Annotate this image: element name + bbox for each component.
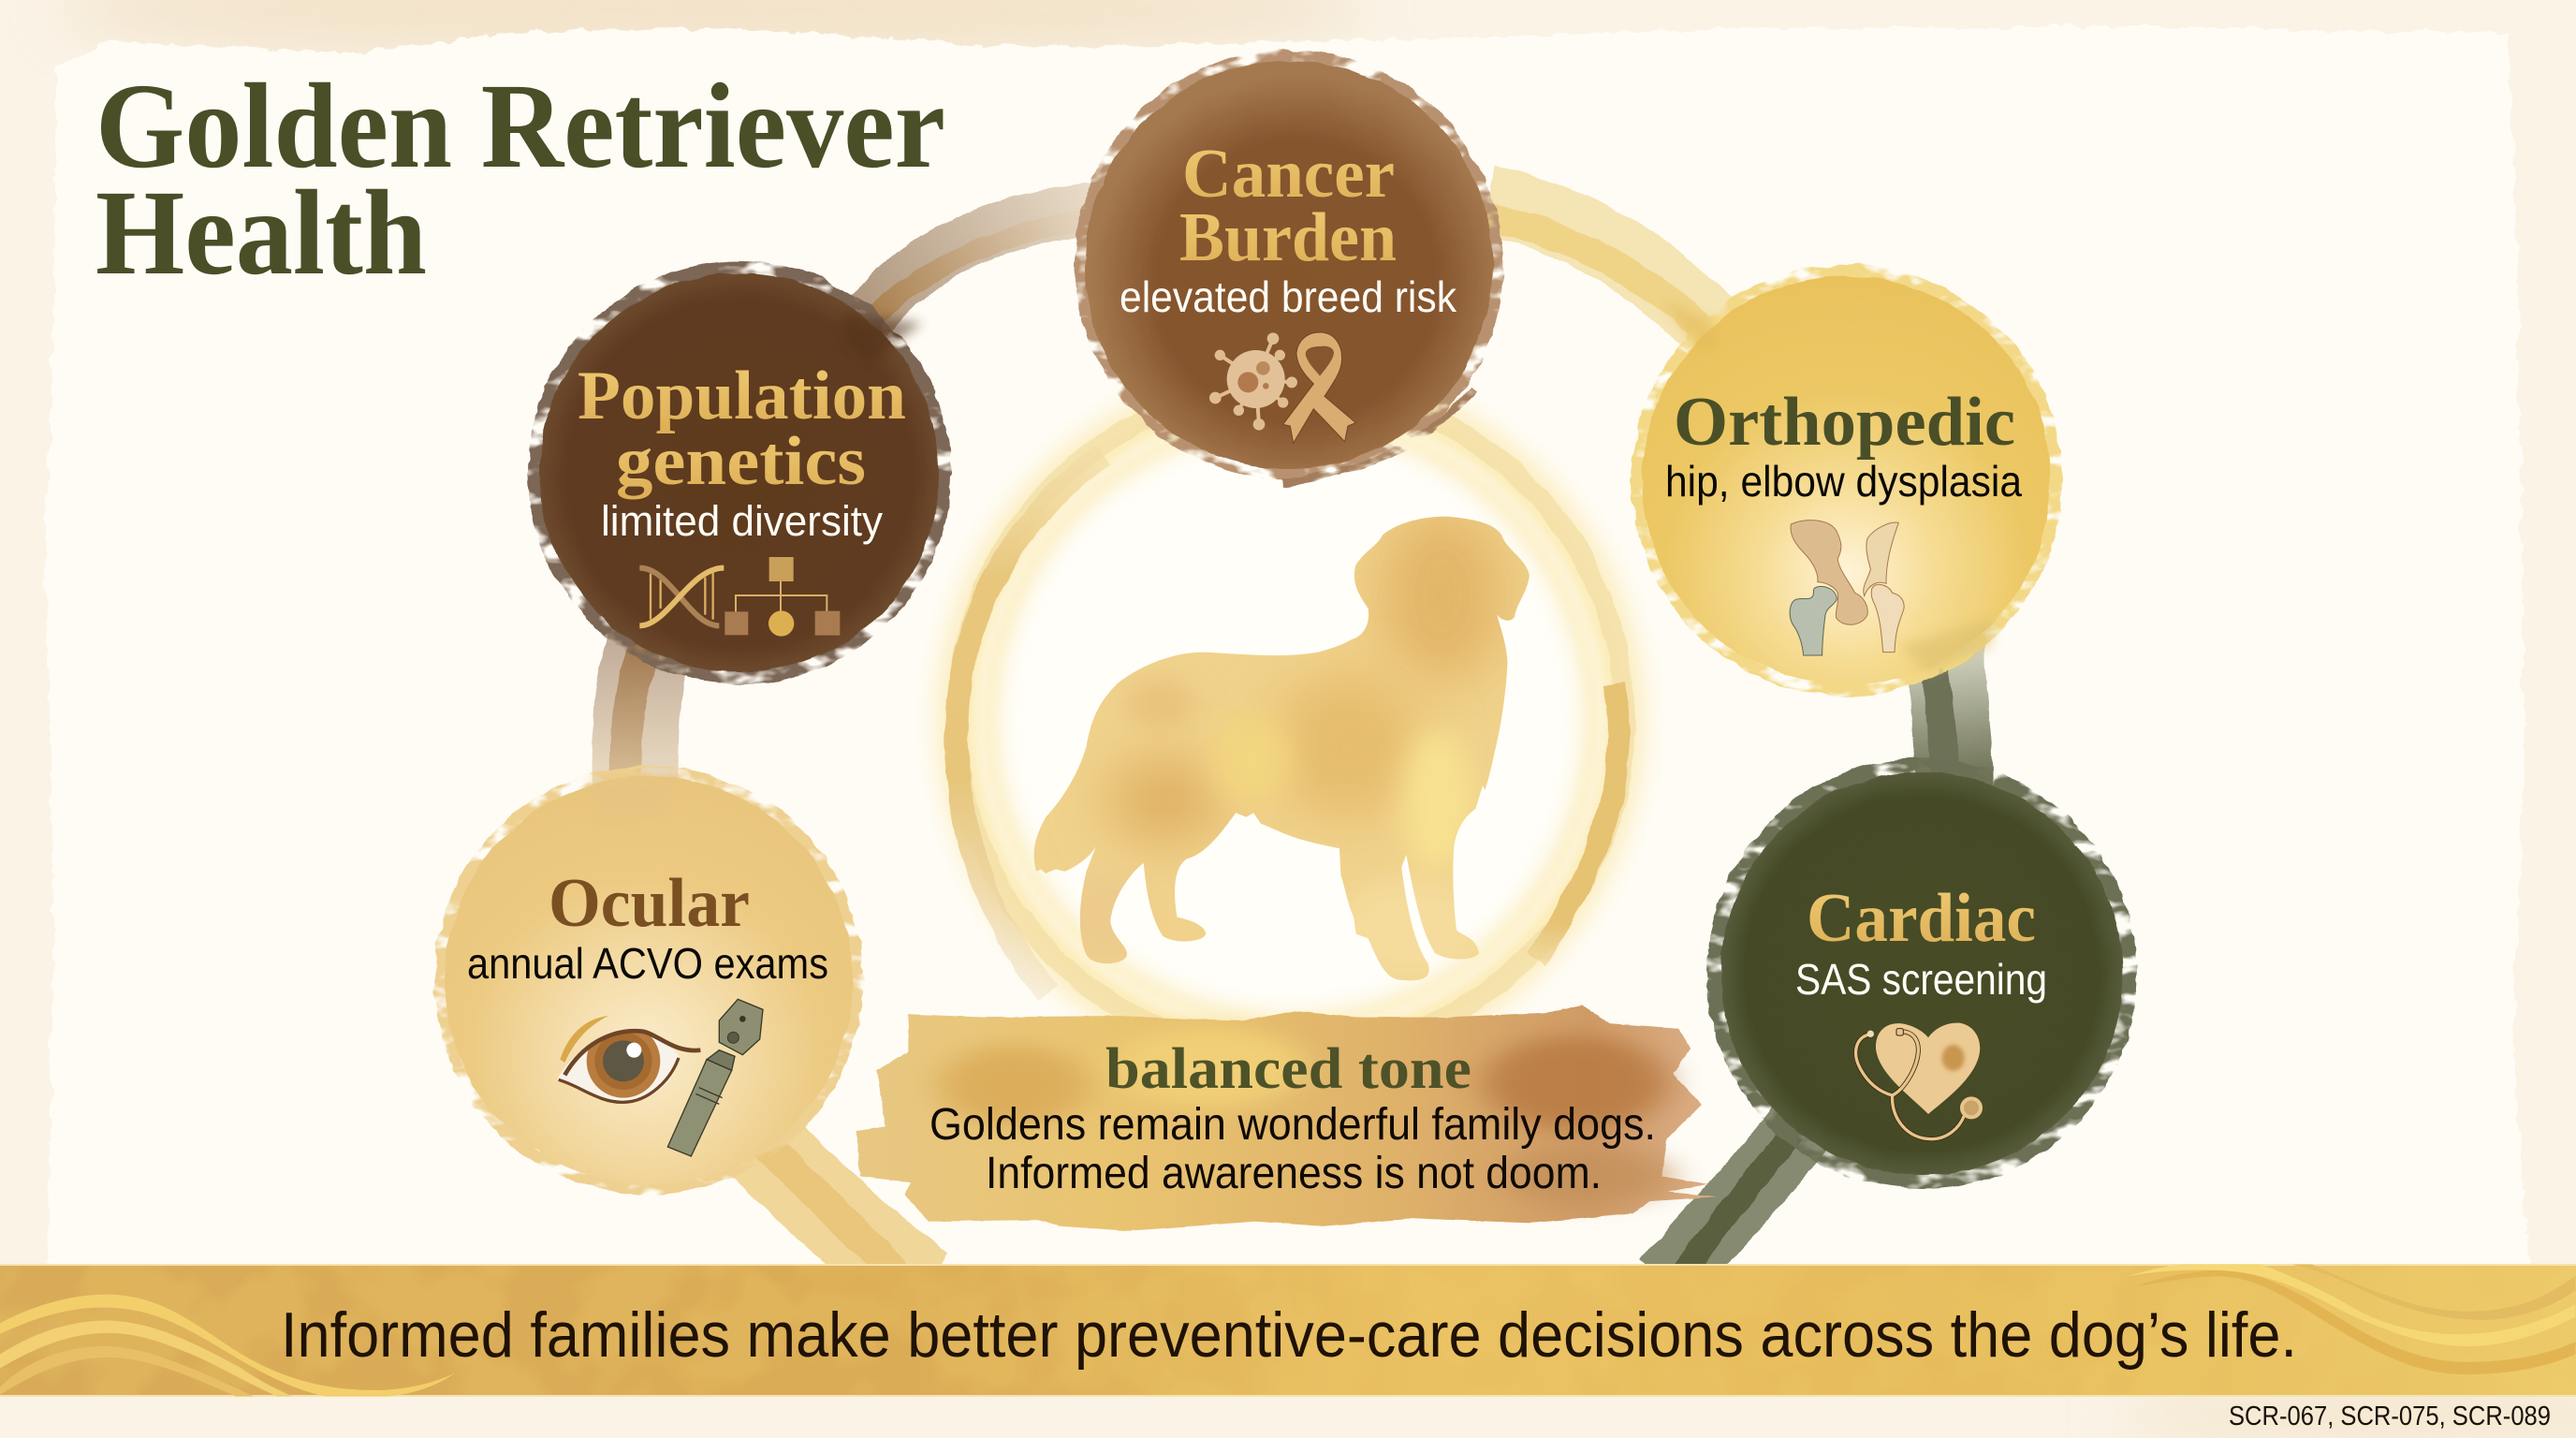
connector: cancer to orthopedic — [1488, 201, 1727, 342]
connector: cardiac to bottom — [1666, 1119, 1807, 1283]
title line 1: Golden Retriever — [95, 59, 945, 194]
brush rim — [1639, 272, 2055, 688]
ring left arc — [957, 454, 1105, 992]
left waves — [0, 1295, 455, 1396]
subtitle: SAS screening — [1795, 955, 2047, 1004]
connector: ocular to bottom — [735, 1119, 922, 1287]
disc — [445, 776, 853, 1184]
heading: Orthopedic — [1674, 384, 2015, 461]
icon: cancer cell and ribbon — [1211, 332, 1355, 443]
connector: population to cancer — [861, 208, 1100, 330]
subtitle: elevated breed risk — [1120, 272, 1457, 321]
subtitle: limited diversity — [601, 497, 883, 545]
title — [95, 59, 945, 301]
panel: ocular — [441, 772, 856, 1188]
callout line 1: Goldens remain wonderful family dogs. — [929, 1100, 1656, 1150]
heading: Ocular — [549, 865, 750, 942]
panel: dog silhouette in centre — [1033, 517, 1530, 981]
central ring with glow — [957, 387, 1625, 1055]
connector: population to ocular — [625, 646, 651, 824]
heading line 2: Burden — [1179, 199, 1397, 276]
panel: balanced tone callout — [856, 1005, 1719, 1231]
icon: hip joint bones — [1790, 521, 1904, 655]
heading: Cardiac — [1807, 880, 2036, 957]
heading: Cancer — [1182, 136, 1395, 213]
icon: eye and ophthalmoscope — [557, 999, 763, 1156]
panel: cancer burden — [1081, 57, 1497, 482]
ring right arc — [1535, 683, 1618, 960]
heading: Population — [578, 358, 906, 434]
overlap of green connector — [1900, 618, 1994, 674]
heading line 2: genetics — [616, 423, 866, 500]
connector: orthopedic to cardiac — [1928, 637, 1954, 796]
title line 2: Health — [95, 166, 427, 301]
disc — [540, 273, 939, 672]
right waves — [2127, 1265, 2575, 1374]
brush rim — [1716, 768, 2128, 1180]
brush rim — [1081, 57, 1497, 473]
callout heading: balanced tone — [1105, 1037, 1471, 1101]
callout wash — [856, 1005, 1719, 1231]
banner text: Informed families make better preventive-care decisions across the dog’s life. — [281, 1299, 2297, 1371]
subtitle: hip, elbow dysplasia — [1665, 457, 2022, 506]
icon: heart and stethoscope — [1856, 1023, 1981, 1139]
callout line 2: Informed awareness is not doom. — [986, 1149, 1602, 1198]
subtitle: annual ACVO exams — [467, 939, 828, 988]
disc — [1085, 61, 1493, 469]
brush rim — [537, 271, 942, 675]
disc — [1643, 276, 2051, 684]
panel: cardiac — [1716, 768, 2128, 1180]
panel: population genetics — [537, 271, 942, 675]
panel: orthopedic — [1639, 272, 2055, 688]
icon: DNA helix and pedigree — [639, 557, 840, 637]
brush rim — [441, 772, 856, 1188]
disc — [1720, 772, 2123, 1175]
banner: bottom takeaway — [0, 1264, 2576, 1397]
